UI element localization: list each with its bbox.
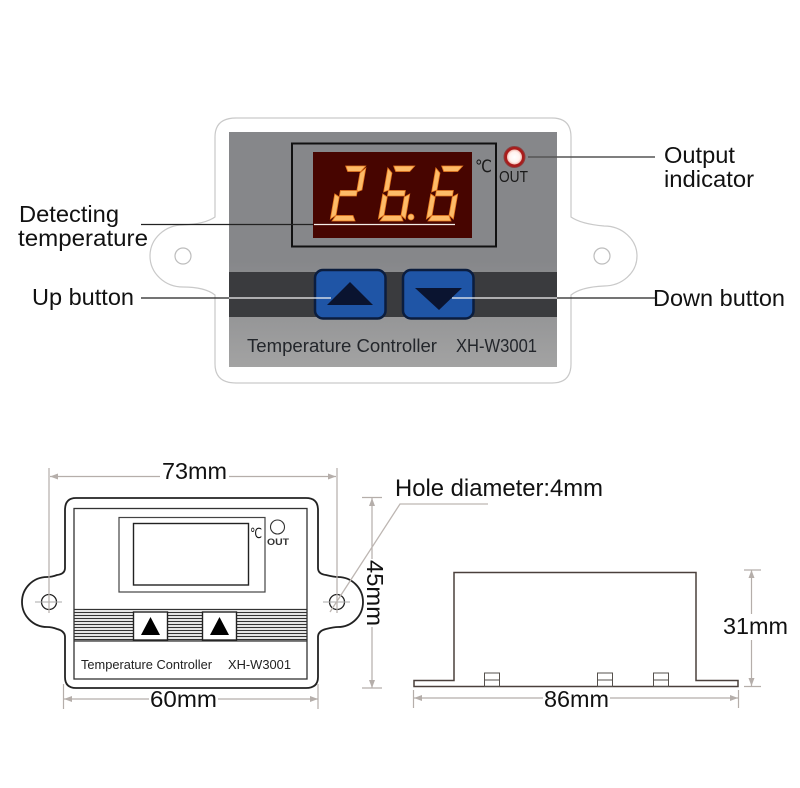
left mounting hole xyxy=(175,248,191,264)
grey faceplate xyxy=(229,132,557,367)
dimension: 73mm width: 73mm xyxy=(162,458,227,484)
digit 6 xyxy=(426,166,463,221)
product name: Temperature Controller xyxy=(81,658,213,672)
dimension: 45mm height xyxy=(362,498,388,688)
reading: 26.6 xyxy=(330,166,463,221)
callout: detecting temperature xyxy=(18,201,455,251)
dimension: 31mm height xyxy=(723,570,788,686)
display window xyxy=(134,524,248,585)
digit 6 xyxy=(378,166,415,221)
device outline with mounting ears xyxy=(150,118,637,383)
callout: detecting temperature: Detecting xyxy=(19,201,119,227)
display frame xyxy=(119,518,265,592)
output LED xyxy=(270,520,284,534)
down button xyxy=(403,270,474,318)
unit symbol: ℃ xyxy=(475,157,492,176)
clip 2 xyxy=(598,673,612,686)
OUT label: OUT xyxy=(267,537,289,548)
dimension: 60mm width xyxy=(64,684,318,712)
decimal point xyxy=(408,214,414,220)
callout: output indicator: Output xyxy=(664,142,735,168)
dimension: 86mm width: 86mm xyxy=(544,686,609,712)
clip 1 xyxy=(484,673,500,686)
dimension: 31mm height: 31mm xyxy=(723,613,788,639)
body and flange xyxy=(414,572,738,686)
dimension: 86mm width xyxy=(414,686,738,712)
callout: output indicator xyxy=(528,142,754,192)
diagram: side view xyxy=(414,572,738,686)
dimension: 45mm height: 45mm xyxy=(362,560,388,626)
callout: detecting temperature: temperature xyxy=(18,225,148,251)
LED display xyxy=(313,152,472,238)
diagram: front dimensions xyxy=(22,498,363,688)
output LED xyxy=(504,146,525,168)
OUT label: OUT xyxy=(499,169,528,186)
callout: output indicator: indicator xyxy=(664,166,754,192)
product name: Temperature Controller xyxy=(247,335,437,356)
body outline xyxy=(22,498,363,688)
up button xyxy=(315,270,386,318)
callout: hole diameter xyxy=(330,475,603,612)
dimension: 73mm width xyxy=(49,458,337,613)
model number: XH-W3001 xyxy=(456,336,537,356)
left hole xyxy=(35,594,62,610)
unit symbol: ℃ xyxy=(250,525,262,541)
callout: down button: Down button xyxy=(653,285,785,311)
callout: up button: Up button xyxy=(32,284,134,310)
right hole xyxy=(323,594,350,610)
clip 3 xyxy=(654,673,668,686)
digit 2 xyxy=(330,166,366,221)
faceplate border xyxy=(74,508,307,679)
panel: controller front view xyxy=(150,118,637,383)
dimension: 60mm width: 60mm xyxy=(150,686,217,712)
striped button band xyxy=(74,610,307,641)
callout: hole diameter: Hole diameter:4mm xyxy=(395,475,603,502)
left button xyxy=(134,612,168,640)
right button xyxy=(202,612,236,640)
dark button band xyxy=(229,272,557,317)
right mounting hole xyxy=(594,248,610,264)
model number: XH-W3001 xyxy=(228,658,291,672)
display frame xyxy=(292,144,496,246)
